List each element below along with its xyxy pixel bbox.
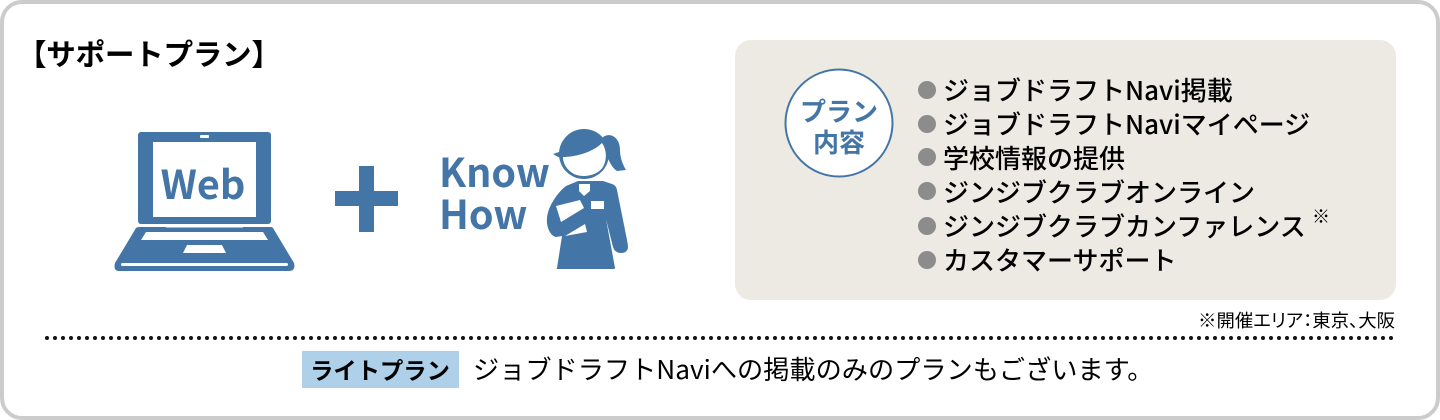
list of plan contents: ジンジブクラブカンファレンス xyxy=(943,207,1306,244)
light plan note xyxy=(302,349,1153,388)
icon: staff woman with document xyxy=(547,129,628,269)
badge: plan contents circle xyxy=(786,70,892,176)
icon: laptop with Web label: Web xyxy=(161,154,245,211)
list of plan contents: 学校情報の提供 xyxy=(943,139,1125,176)
Know How label xyxy=(439,142,550,241)
panel: plan contents xyxy=(735,40,1396,300)
footnote: venue area: ※開催エリア：東京、大阪 xyxy=(1198,307,1395,333)
light plan tag: ライトプラン xyxy=(310,352,450,386)
heading: 【サポートプラン】 xyxy=(17,31,281,74)
badge: plan contents circle: プラン xyxy=(800,92,878,129)
list of plan contents: ジンジブクラブオンライン xyxy=(943,173,1255,210)
badge: plan contents circle: 内容 xyxy=(813,123,865,160)
icon: plus sign xyxy=(335,166,398,232)
icon: laptop with Web label xyxy=(114,132,294,271)
light plan description: ジョブドラフトNaviへの掲載のみのプランもございます。 xyxy=(473,349,1153,387)
list of plan contents: ジョブドラフトNavi掲載 xyxy=(943,71,1233,108)
list of plan contents: カスタマーサポート xyxy=(943,241,1176,278)
Know How label: How xyxy=(439,184,527,241)
list of plan contents: ※ xyxy=(1312,203,1330,229)
list of plan contents: ジョブドラフトNaviマイページ xyxy=(943,105,1310,142)
list of plan contents xyxy=(918,71,1330,278)
Know How label: Know xyxy=(439,142,550,199)
